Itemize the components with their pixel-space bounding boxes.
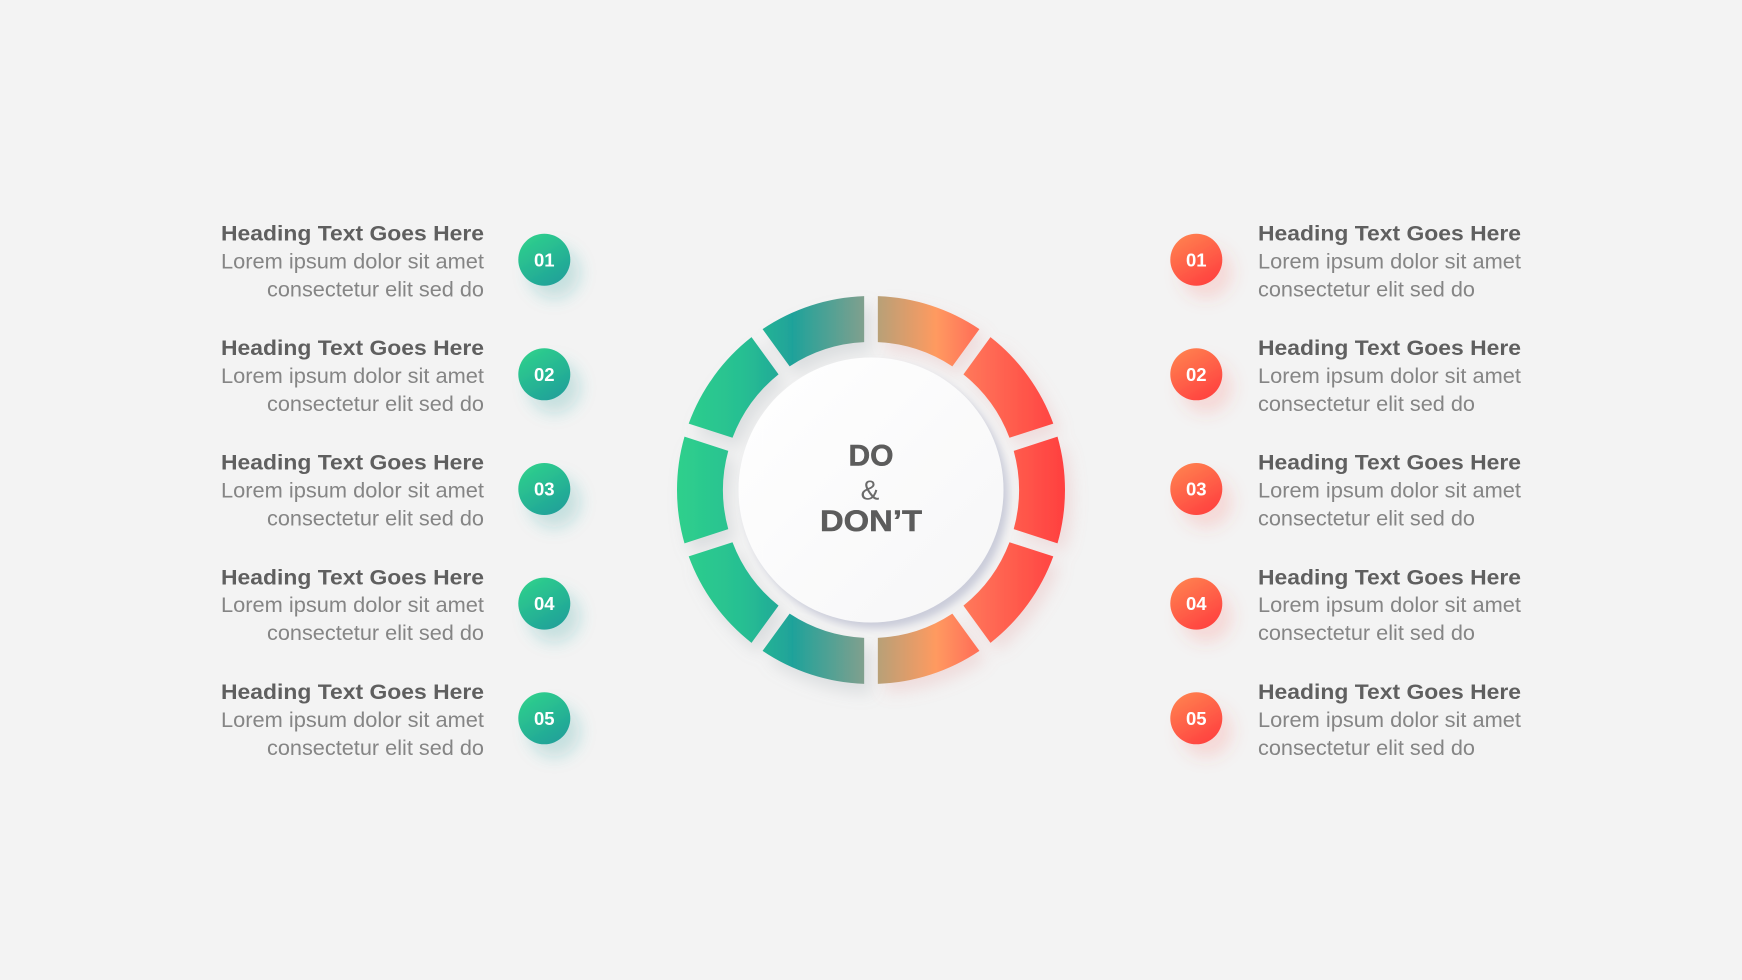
don't item 01: 01 bbox=[1186, 249, 1207, 270]
do item 02: Heading Text Goes Here bbox=[221, 336, 484, 360]
do item 02: 02 bbox=[534, 364, 555, 385]
do item 02: Lorem ipsum dolor sit amet bbox=[221, 364, 484, 388]
don't item 02: Lorem ipsum dolor sit amet bbox=[1258, 364, 1521, 388]
centre title: & bbox=[861, 474, 880, 506]
don't item 01: consectetur elit sed do bbox=[1258, 277, 1475, 301]
do item 03: 03 bbox=[534, 479, 555, 500]
do item 01 bbox=[221, 221, 570, 301]
centre disc bbox=[738, 358, 1004, 622]
chart: red ring segments bbox=[878, 296, 1065, 684]
don't item 01: Heading Text Goes Here bbox=[1258, 221, 1521, 245]
do item 03: Lorem ipsum dolor sit amet bbox=[221, 479, 484, 503]
don't item 04: 04 bbox=[1186, 593, 1207, 614]
do item 02: consectetur elit sed do bbox=[267, 392, 484, 416]
chart: green ring segments bbox=[677, 296, 864, 684]
don't item 04: Lorem ipsum dolor sit amet bbox=[1258, 593, 1521, 617]
don't item 03: Lorem ipsum dolor sit amet bbox=[1258, 479, 1521, 503]
do item 05 bbox=[221, 680, 570, 760]
do item 04: Heading Text Goes Here bbox=[221, 565, 484, 589]
don't item 04 bbox=[1170, 565, 1521, 645]
don't item 05: Lorem ipsum dolor sit amet bbox=[1258, 708, 1521, 732]
do item 04: Lorem ipsum dolor sit amet bbox=[221, 593, 484, 617]
don't item 02: 02 bbox=[1186, 364, 1207, 385]
do item 01: consectetur elit sed do bbox=[267, 277, 484, 301]
don't item 05: Heading Text Goes Here bbox=[1258, 680, 1521, 704]
panel: do list bbox=[221, 221, 570, 760]
don't item 03: 03 bbox=[1186, 479, 1207, 500]
panel: don't list bbox=[1170, 221, 1521, 760]
don't item 03: Heading Text Goes Here bbox=[1258, 451, 1521, 475]
centre title bbox=[820, 440, 922, 538]
centre title: DO bbox=[848, 440, 894, 472]
do item 03 bbox=[221, 451, 570, 531]
don't item 05: consectetur elit sed do bbox=[1258, 736, 1475, 760]
do item 01: Heading Text Goes Here bbox=[221, 221, 484, 245]
don't item 02: consectetur elit sed do bbox=[1258, 392, 1475, 416]
don't item 05 bbox=[1170, 680, 1521, 760]
do item 03: Heading Text Goes Here bbox=[221, 451, 484, 475]
do item 04: 04 bbox=[534, 593, 555, 614]
do item 05: 05 bbox=[534, 708, 555, 729]
do item 03: consectetur elit sed do bbox=[267, 507, 484, 531]
do item 01: 01 bbox=[534, 249, 555, 270]
don't item 03: consectetur elit sed do bbox=[1258, 507, 1475, 531]
do item 05: Lorem ipsum dolor sit amet bbox=[221, 708, 484, 732]
centre title: DON’T bbox=[820, 505, 922, 538]
do item 05: consectetur elit sed do bbox=[267, 736, 484, 760]
don't item 04: Heading Text Goes Here bbox=[1258, 565, 1521, 589]
don't item 02: Heading Text Goes Here bbox=[1258, 336, 1521, 360]
don't item 03 bbox=[1170, 451, 1521, 531]
do item 04: consectetur elit sed do bbox=[267, 621, 484, 645]
do item 02 bbox=[221, 336, 570, 416]
don't item 01 bbox=[1170, 221, 1521, 301]
do item 04 bbox=[221, 565, 570, 645]
do item 01: Lorem ipsum dolor sit amet bbox=[221, 249, 484, 273]
don't item 04: consectetur elit sed do bbox=[1258, 621, 1475, 645]
don't item 01: Lorem ipsum dolor sit amet bbox=[1258, 249, 1521, 273]
don't item 02 bbox=[1170, 336, 1521, 416]
do item 05: Heading Text Goes Here bbox=[221, 680, 484, 704]
don't item 05: 05 bbox=[1186, 708, 1207, 729]
